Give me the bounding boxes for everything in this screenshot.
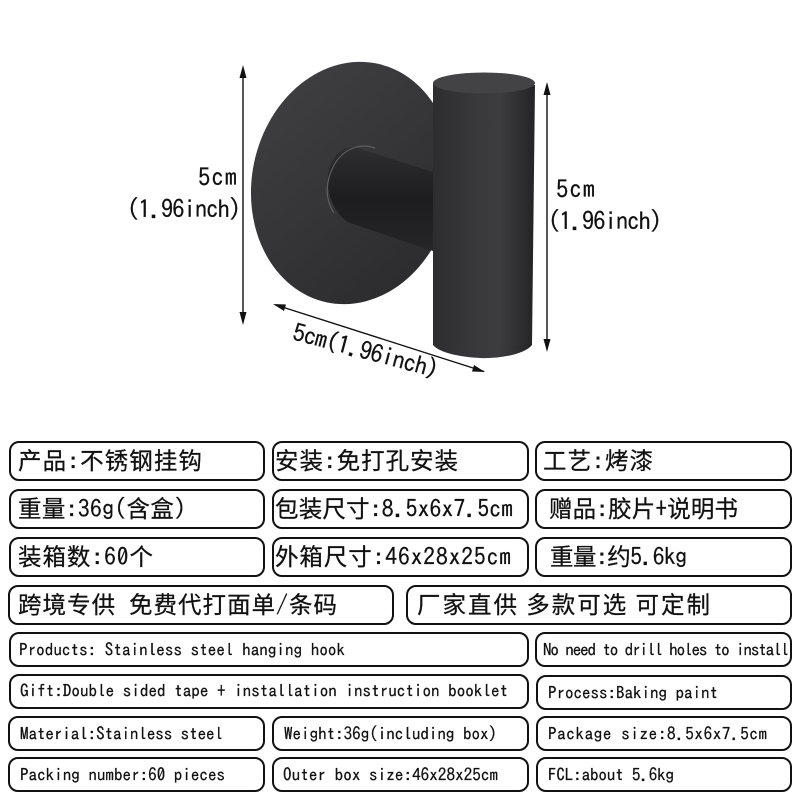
spec: material: Material:Stainless steel <box>20 726 223 743</box>
spec: process: 工艺:烤漆 <box>543 442 653 476</box>
spec: gift <box>536 490 791 528</box>
spec: product <box>10 442 264 480</box>
spec: process <box>537 676 791 709</box>
dimension arrow: depth <box>273 304 485 372</box>
spec: gift <box>10 675 528 708</box>
spec: weight <box>273 717 528 750</box>
spec: full carton weight: FCL:about 5.6kg <box>548 767 674 784</box>
dimension label: disc height <box>127 164 241 221</box>
spec: outer box size <box>273 758 528 791</box>
Chinese specification table <box>9 442 791 624</box>
product photo: black round wall hook <box>229 43 535 358</box>
English specification table <box>9 633 791 791</box>
spec: weight <box>10 490 264 528</box>
spec: carton weight <box>536 538 791 576</box>
spec: process: Process:Baking paint <box>548 685 718 702</box>
spec: no drilling <box>536 633 791 666</box>
spec: products: Products: Stainless steel hanging hook <box>19 642 345 659</box>
dimension label: disc height: (1.96inch) <box>127 196 241 221</box>
spec: packing number: Packing number:60 pieces <box>20 767 225 784</box>
dimension label: depth: 5cm(1.96inch) <box>290 319 442 382</box>
spec: outer box size: Outer box size:46x28x25cm <box>283 767 498 784</box>
spec: weight: Weight:36g(including box) <box>284 726 497 743</box>
spec: package size <box>537 717 791 750</box>
hook stem <box>327 146 436 252</box>
spec: installation: 安装:免打孔安装 <box>275 442 458 476</box>
spec: package size: Package size:8.5x6x7.5cm <box>548 726 767 743</box>
spec: packing count <box>10 538 264 576</box>
dimension arrow: hook height <box>544 82 550 352</box>
note: factory direct: 厂家直供 多款可选 可定制 <box>417 586 710 620</box>
hook mounting disc <box>229 43 475 323</box>
spec: gift: Gift:Double sided tape + installation instruction booklet <box>20 683 508 700</box>
dimension label: disc height: 5cm <box>198 164 237 189</box>
spec: installation <box>273 442 528 480</box>
spec: products <box>10 633 528 666</box>
note: factory direct <box>407 586 791 624</box>
dimension label: hook height: (1.96inch) <box>548 208 662 233</box>
spec: packing count: 装箱数:60个 <box>18 538 153 572</box>
hook cylinder <box>433 72 535 358</box>
spec: outer box size: 外箱尺寸:46x28x25cm <box>275 538 511 572</box>
spec: full carton weight <box>537 758 791 791</box>
note: cross-border supply: 跨境专供 免费代打面单/条码 <box>18 586 337 620</box>
spec: packing number <box>9 758 264 791</box>
spec: weight: 重量:36g(含盒) <box>18 490 186 524</box>
spec: product: 产品:不锈钢挂钩 <box>18 442 202 476</box>
spec: no drilling: No need to drill holes to install <box>543 642 789 659</box>
dimension label: hook height: 5cm <box>556 176 595 201</box>
spec: package size: 包装尺寸:8.5x6x7.5cm <box>275 490 513 524</box>
spec: carton weight: 重量:约5.6kg <box>550 538 687 572</box>
spec: gift: 赠品:胶片+说明书 <box>549 490 738 524</box>
spec: material <box>9 717 264 750</box>
dimension label: hook height <box>548 176 662 233</box>
spec: process <box>536 442 791 480</box>
dimension arrow: disc height <box>240 65 246 325</box>
